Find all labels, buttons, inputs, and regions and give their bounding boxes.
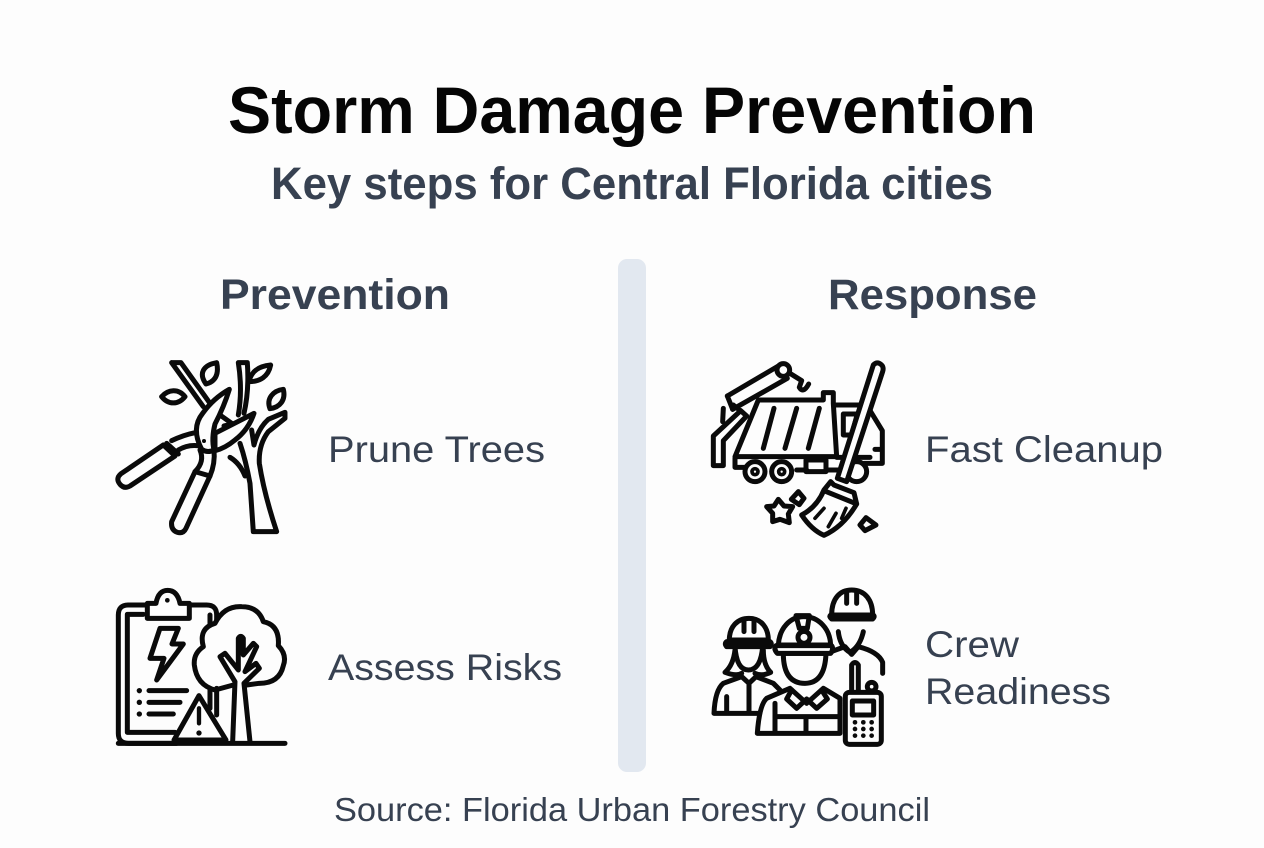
label: Crew Readiness (925, 624, 1111, 712)
label: Fast Cleanup: Fast Cleanup (925, 429, 1163, 470)
source note: Source: Florida Urban Forestry Council (334, 791, 930, 828)
label: Prune Trees: Prune Trees (328, 429, 545, 470)
icon: clipboard, lightning, tree and warning sign (118, 590, 285, 743)
label: Crew Readiness: Crew (925, 624, 1019, 665)
label: Assess Risks: Assess Risks (328, 647, 562, 688)
column heading: Response: Response (828, 271, 1037, 319)
icon: work crew with hard hats and radio (714, 590, 883, 744)
icon: garbage truck and broom (713, 363, 883, 535)
column heading: Prevention: Prevention (220, 271, 450, 319)
title: Storm Damage Prevention (228, 73, 1036, 147)
label: Crew Readiness: Readiness (925, 671, 1111, 712)
subtitle: Key steps for Central Florida cities (271, 158, 993, 209)
center divider (618, 259, 646, 772)
icon: pruning shears and tree branches (118, 363, 285, 533)
